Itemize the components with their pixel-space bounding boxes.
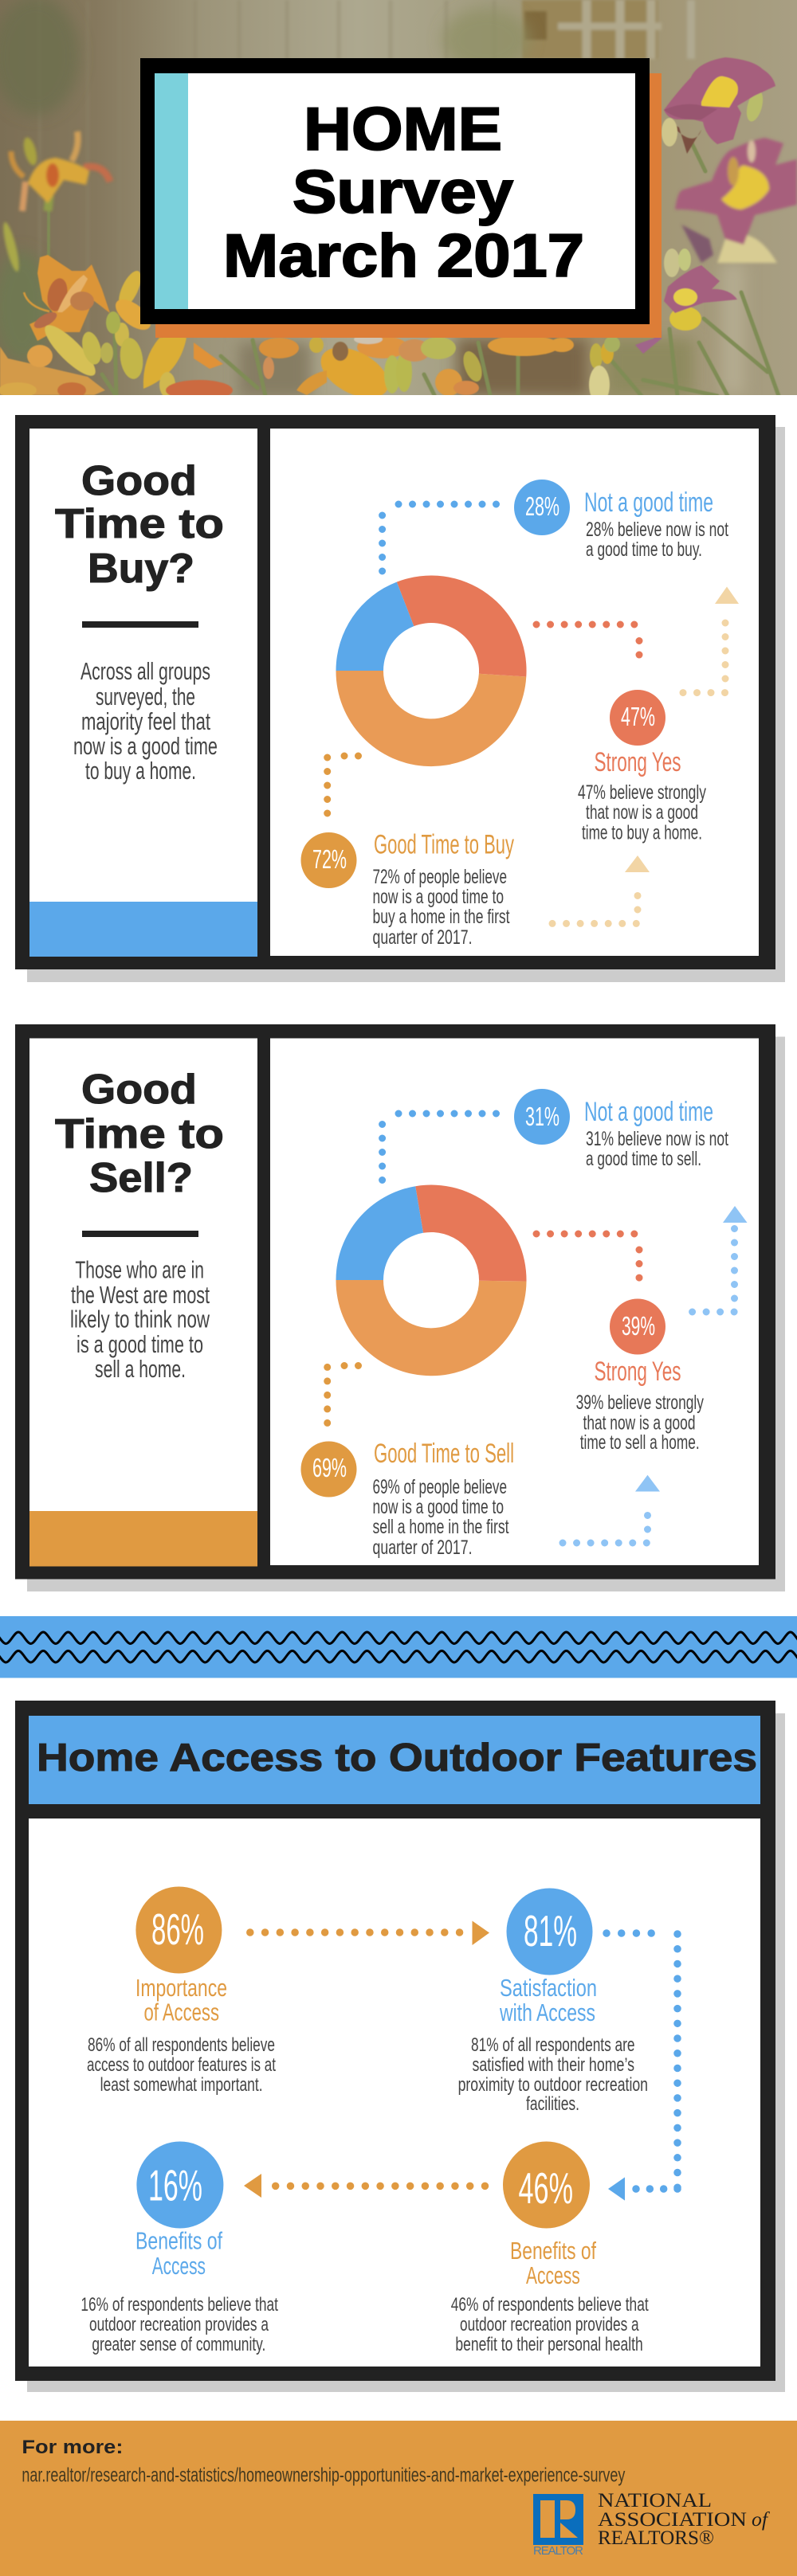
intro text: likely to think now [70, 1305, 210, 1333]
stat: benefits of access, community: 16% of respondents believe that [80, 2294, 278, 2316]
body area [29, 1818, 760, 2367]
stat: importance of access: access to outdoor features is at [87, 2054, 276, 2076]
stat: benefits of access, health: 46% [518, 2163, 573, 2213]
orange footer bar [29, 1511, 257, 1566]
right column [270, 429, 759, 956]
arrow: satisfaction to health benefits [607, 1933, 677, 2201]
callout: not a good time [383, 480, 728, 571]
logo: realtor block R [533, 2494, 583, 2558]
callout: not a good time: Not a good time [584, 1097, 713, 1127]
logo: national association of realtors wordmark: NATIONAL [598, 2490, 712, 2511]
stat: importance of access: least somewhat important. [100, 2074, 263, 2096]
hero title card [140, 58, 662, 338]
callout: not a good time [383, 1089, 728, 1180]
callout: strong yes: 39% [622, 1311, 655, 1341]
panel: good time to buy [15, 415, 785, 982]
callout: not a good time: Not a good time [584, 487, 713, 518]
stat: satisfaction with access: facilities. [526, 2093, 579, 2115]
arrow: upper light blue [693, 1206, 748, 1312]
callout: good time to sell: quarter of 2017. [373, 1537, 472, 1559]
arrow: lower light blue [563, 1475, 660, 1543]
callout: not a good time: 31% believe now is not [586, 1128, 728, 1150]
panel shadow [27, 1713, 785, 2392]
stat: satisfaction with access: proximity to outdoor recreation [458, 2074, 648, 2096]
logo: national association of realtors wordmark [598, 2490, 770, 2549]
stat: satisfaction with access: 81% [524, 1906, 577, 1955]
callout: not a good time: 31% [525, 1102, 559, 1131]
callout: not a good time: 28% believe now is not [586, 519, 728, 541]
logo: national association of realtors wordmark: of [752, 2509, 770, 2531]
pink lily 3 [589, 249, 737, 404]
stat: importance of access: 86% [151, 1905, 204, 1954]
orange lily upper left [0, 131, 110, 273]
callout: strong yes: Strong Yes [595, 1357, 681, 1387]
callout: strong yes [536, 1234, 704, 1454]
callout: good time to sell [301, 1365, 514, 1559]
heading: good time to buy: Buy? [88, 546, 194, 592]
donut chart [336, 576, 527, 766]
callout: good time to buy: now is a good time to [373, 886, 504, 908]
stems [48, 143, 779, 396]
orange offset block [155, 73, 662, 338]
intro text: sell a home. [95, 1355, 186, 1383]
callout: good time to sell: 69% of people believe [373, 1476, 507, 1498]
stat: benefits of access, health: Benefits of [510, 2237, 596, 2265]
heading: good time to buy: Time to [55, 501, 224, 547]
donut chart [336, 1185, 527, 1376]
callout: good time to buy: 72% [312, 844, 347, 874]
intro text: majority feel that [81, 707, 210, 735]
callout: strong yes: that now is a good [583, 1411, 695, 1434]
callout: not a good time: a good time to buy. [586, 538, 702, 561]
title: HOME [304, 96, 502, 163]
panel frame [15, 1701, 775, 2381]
callout: good time to sell: 69% [312, 1453, 347, 1482]
stat: benefits of access, health: outdoor recreation provides a [460, 2314, 639, 2335]
stat: benefits of access, health: Access [526, 2261, 580, 2289]
callout: good time to buy: buy a home in the first [373, 906, 510, 928]
pink lily 1 [662, 57, 775, 154]
callout: good time to buy: quarter of 2017. [373, 926, 472, 949]
panel shadow [27, 1037, 785, 1591]
pink lily 2 [675, 138, 797, 263]
callout: strong yes: that now is a good [586, 801, 698, 824]
white card [155, 73, 635, 309]
stat: benefits of access, community: outdoor recreation provides a [89, 2314, 269, 2335]
stat: satisfaction with access: 81% of all respondents are [471, 2034, 634, 2056]
callout: strong yes: time to sell a home. [580, 1431, 700, 1454]
panel frame [15, 1024, 775, 1579]
callout: strong yes: time to buy a home. [582, 822, 702, 844]
callout: good time to sell: sell a home in the first [373, 1516, 509, 1538]
logo: national association of realtors wordmark: ASSOCIATION [598, 2509, 747, 2531]
stat: importance of access: Importance [135, 1974, 227, 2002]
intro text: is a good time to [77, 1330, 203, 1358]
heading: good time to sell: Good [81, 1067, 197, 1113]
callout: strong yes: Strong Yes [595, 747, 681, 777]
stat: benefits of access, health: benefit to their personal health [455, 2334, 643, 2355]
callout: good time to buy: 72% of people believe [373, 866, 507, 888]
footer [0, 2421, 797, 2576]
panel: home access to outdoor features [15, 1701, 785, 2392]
intro text: Across all groups [80, 657, 210, 685]
stat: benefits of access, health: 46% of respondents believe that [451, 2294, 649, 2316]
left column [29, 429, 257, 957]
stat: satisfaction with access: satisfied with their home’s [472, 2054, 634, 2076]
title [223, 96, 584, 290]
heading: good time to buy: Good [81, 458, 197, 504]
callout: good time to sell: Good Time to Sell [374, 1439, 514, 1469]
for more heading: For more: [22, 2437, 123, 2458]
intro text: to buy a home. [85, 757, 196, 785]
arrow: lower tan [552, 855, 650, 923]
stat: benefits of access, community: 16% [148, 2161, 202, 2210]
wave divider band [0, 1616, 797, 1678]
divider [82, 621, 198, 628]
callout: strong yes: 39% believe strongly [576, 1392, 704, 1414]
hero photo: day lilies [0, 0, 797, 409]
intro text: Those who are in [75, 1255, 204, 1284]
left column [29, 1039, 257, 1566]
stat: benefits of access, health [451, 2141, 649, 2355]
stat: benefits of access, community: Access [152, 2252, 206, 2280]
panel shadow [27, 427, 785, 982]
bud row and lower flowers [0, 271, 574, 395]
stat: satisfaction with access [458, 1888, 648, 2115]
stat: satisfaction with access: Satisfaction [500, 1974, 597, 2002]
arrow: health to community benefits [244, 2174, 485, 2198]
stat: benefits of access, community: greater sense of community. [92, 2334, 265, 2355]
logo: national association of realtors wordmark: REALTORS® [598, 2527, 714, 2549]
intro text: the West are most [71, 1281, 210, 1309]
heading: good time to sell: Sell? [89, 1155, 193, 1201]
panel frame [15, 415, 775, 969]
stat: importance of access: 86% of all respondents believe [88, 2034, 275, 2056]
logo: realtor block R: REALTOR [533, 2544, 583, 2558]
panel: good time to sell [15, 1024, 785, 1591]
header band [29, 1716, 760, 1804]
callout: strong yes: 47% [621, 702, 655, 731]
stat: importance of access [87, 1886, 276, 2096]
callout: good time to buy [301, 756, 514, 949]
title: Survey [292, 159, 513, 226]
callout: strong yes [536, 624, 706, 844]
callout: not a good time: 28% [525, 491, 559, 521]
callout: good time to sell: now is a good time to [373, 1496, 504, 1518]
title: March 2017 [223, 222, 584, 290]
stat: benefits of access, community [80, 2141, 278, 2355]
heading: good time to sell: Time to [55, 1111, 224, 1157]
blue footer bar [29, 902, 257, 957]
arrow: importance to satisfaction [250, 1921, 489, 1945]
black frame [140, 58, 650, 324]
intro text: now is a good time [73, 732, 218, 760]
intro text: surveyed, the [96, 683, 195, 711]
arrow: upper tan [683, 586, 739, 693]
stat: benefits of access, community: Benefits of [135, 2227, 222, 2255]
teal stripe [155, 73, 188, 309]
right column [270, 1039, 759, 1565]
divider [82, 1231, 198, 1237]
stat: importance of access: of Access [143, 1999, 219, 2026]
callout: strong yes: 47% believe strongly [578, 781, 706, 804]
section title: Home Access to Outdoor Features [37, 1736, 757, 1779]
stat: satisfaction with access: with Access [499, 1999, 595, 2026]
orange lily lower left [24, 255, 110, 341]
callout: good time to buy: Good Time to Buy [374, 830, 514, 860]
callout: not a good time: a good time to sell. [586, 1148, 701, 1170]
